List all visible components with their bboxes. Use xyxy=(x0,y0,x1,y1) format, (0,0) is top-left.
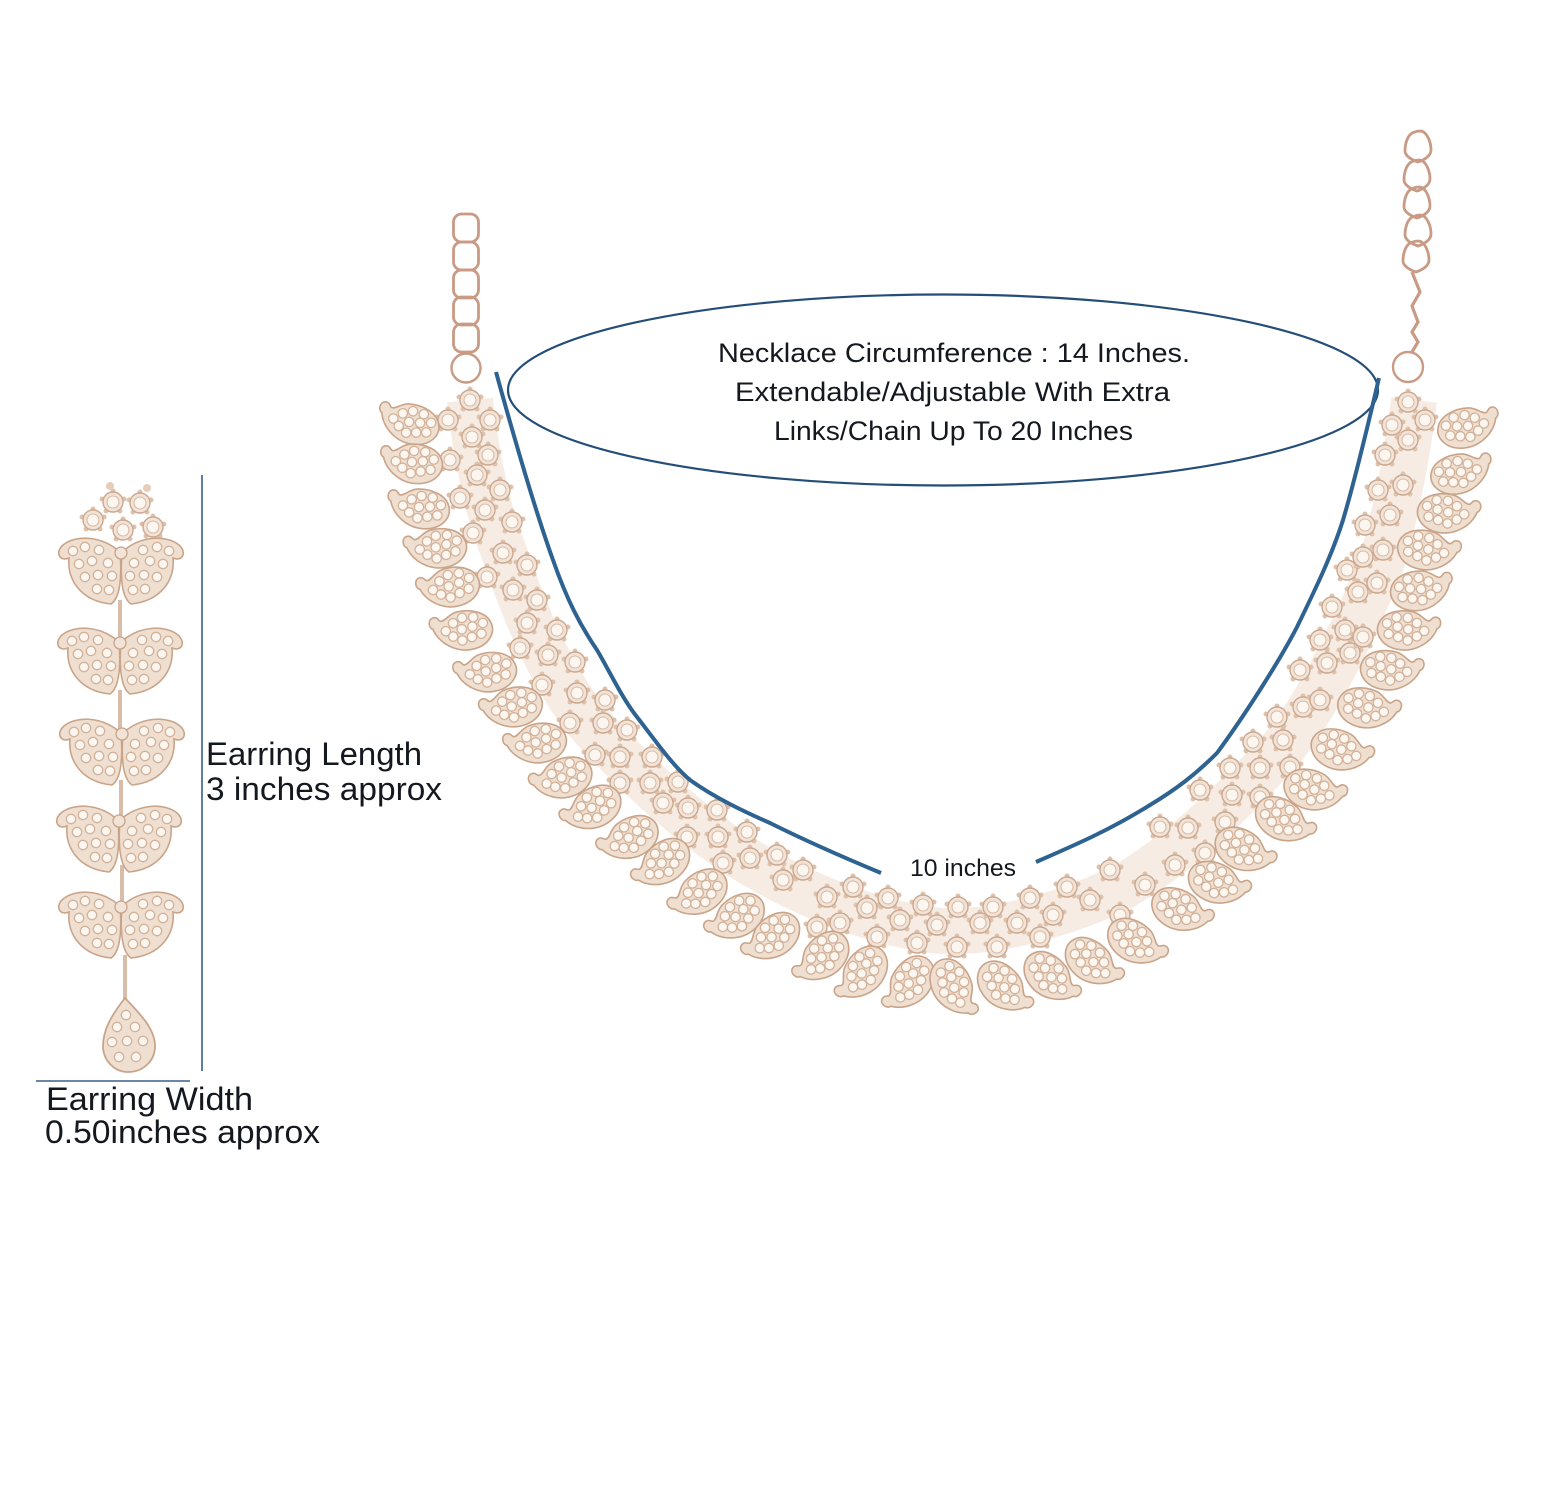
left extension chain xyxy=(452,214,480,382)
earring tier 4 xyxy=(57,806,181,872)
earring width line xyxy=(36,1080,190,1082)
earring width label: 0.50inches approx xyxy=(45,1114,320,1150)
necklace circumference label: Extendable/Adjustable With Extra xyxy=(735,377,1171,407)
earring width label: Earring Width xyxy=(46,1081,253,1117)
necklace circumference ellipse xyxy=(508,294,1378,486)
necklace xyxy=(377,131,1499,1025)
necklace circumference label xyxy=(718,338,1190,446)
necklace circumference label: Links/Chain Up To 20 Inches xyxy=(774,416,1133,446)
earring length label: 3 inches approx xyxy=(206,771,442,807)
inner floral band xyxy=(434,386,1438,958)
earring width label xyxy=(45,1081,320,1150)
earring tier 2 xyxy=(58,628,182,694)
earring crown xyxy=(80,482,166,542)
earring length label xyxy=(206,736,442,807)
earring links xyxy=(120,600,125,1000)
blue drop line right xyxy=(1036,378,1379,862)
earring tier 3 xyxy=(60,719,184,785)
blue drop line left xyxy=(496,372,881,873)
earring tier 5 xyxy=(59,892,183,958)
10 inches label: 10 inches xyxy=(910,855,1016,882)
earring length label: Earring Length xyxy=(206,736,422,772)
earring length line xyxy=(201,475,203,1071)
earring xyxy=(57,482,184,1072)
outer paisley row xyxy=(377,401,1499,1025)
right extension chain xyxy=(1393,131,1431,382)
filigree band behind stones xyxy=(470,400,1414,931)
earring teardrop xyxy=(103,998,155,1072)
earring tier 1 xyxy=(59,538,183,604)
necklace circumference label: Necklace Circumference : 14 Inches. xyxy=(718,338,1190,368)
